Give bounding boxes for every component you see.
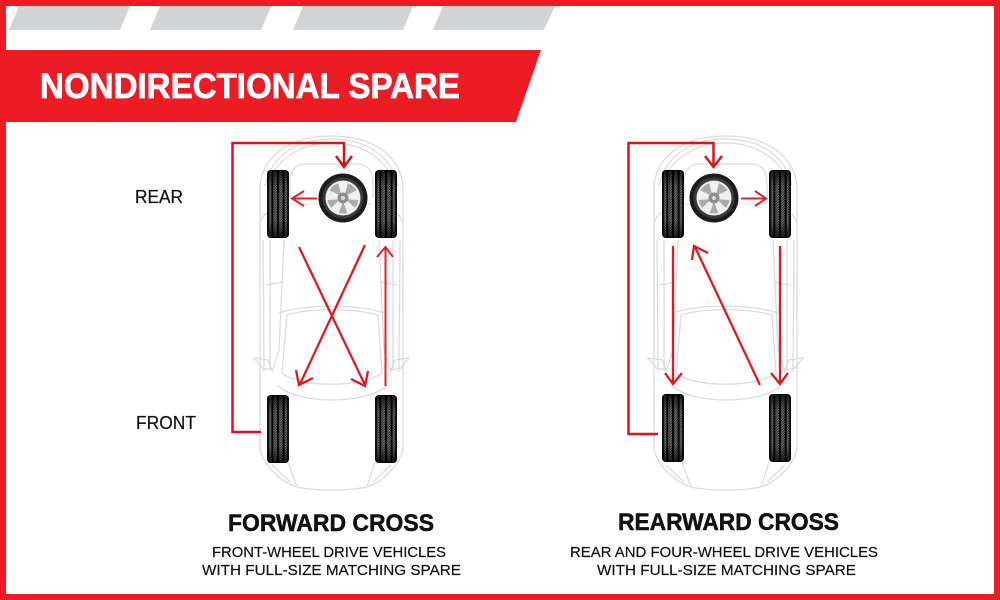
tire: front right xyxy=(375,395,397,463)
arrow: rear left to front left xyxy=(665,246,682,384)
tire: rear left xyxy=(662,170,684,238)
tire: front left xyxy=(267,395,289,463)
arrow: front right to rear right xyxy=(377,247,393,386)
arrow: spare to rear right xyxy=(741,191,766,206)
tire: rear right xyxy=(769,170,791,238)
caption: rearward cross xyxy=(570,509,878,579)
spare wheel xyxy=(318,174,368,222)
tire: rear left xyxy=(267,170,289,238)
arrow: spare to rear left xyxy=(292,191,317,206)
tire: rear right xyxy=(375,170,397,238)
description line 1: FRONT-WHEEL DRIVE VEHICLES xyxy=(212,544,446,561)
arrow: front right to rear left xyxy=(692,246,760,385)
title banner xyxy=(0,50,541,122)
label: rear: REAR xyxy=(135,187,183,207)
car outline xyxy=(254,136,409,490)
heading: rearward cross: REARWARD CROSS xyxy=(618,509,839,536)
diagram: rearward cross xyxy=(628,136,803,490)
caption: forward cross xyxy=(202,510,461,579)
description line 2: WITH FULL-SIZE MATCHING SPARE xyxy=(202,562,461,579)
arrow: rear left to front right xyxy=(299,247,368,386)
arrow: front left to spare position xyxy=(628,143,722,434)
arrow: front left to spare position xyxy=(232,143,352,432)
diagram: forward cross xyxy=(232,136,409,490)
description line 2: WITH FULL-SIZE MATCHING SPARE xyxy=(597,562,856,579)
tire: front left xyxy=(662,394,684,462)
spare wheel xyxy=(690,174,738,222)
label: front: FRONT xyxy=(136,413,196,433)
tire: front right xyxy=(769,394,791,462)
heading: forward cross: FORWARD CROSS xyxy=(228,510,434,537)
title: NONDIRECTIONAL SPARE xyxy=(40,67,460,106)
grey road-stripe decoration xyxy=(9,6,555,30)
description line 1: REAR AND FOUR-WHEEL DRIVE VEHICLES xyxy=(570,544,878,561)
arrow: rear right to front left xyxy=(296,245,365,385)
arrow: rear right to front right xyxy=(771,246,788,384)
car outline xyxy=(648,136,803,490)
